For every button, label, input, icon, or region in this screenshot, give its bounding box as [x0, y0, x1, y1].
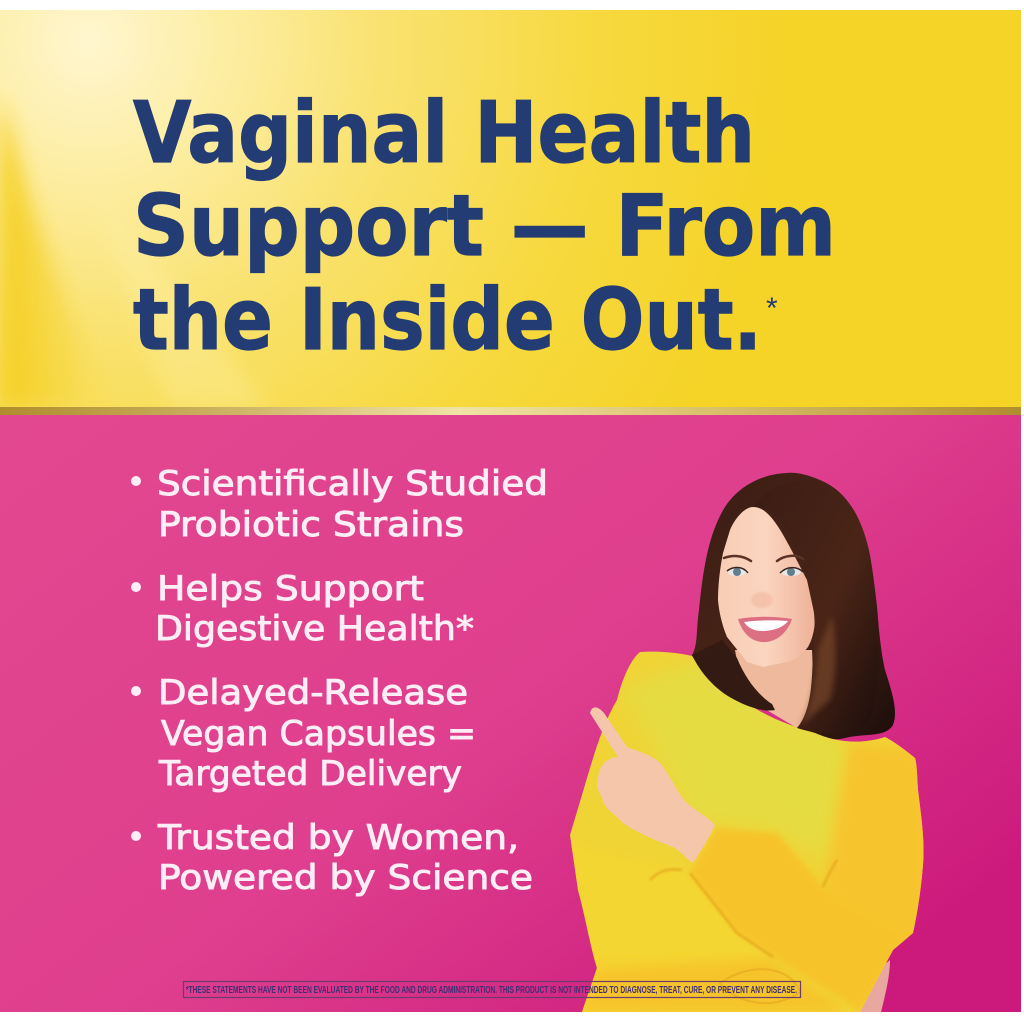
panel: pink lower background — [0, 415, 1021, 1012]
bullet: delayed release capsules — [131, 673, 476, 794]
bullet: digestive health: Helps Support — [157, 569, 424, 609]
heading: the Inside Out. — [133, 271, 762, 370]
panel: yellow headline background — [0, 10, 1021, 408]
disclaimer box — [184, 982, 800, 998]
bullet: delayed release capsules: Vegan Capsules = — [161, 714, 476, 754]
hair left strand over neck — [692, 640, 775, 711]
bullet: delayed release capsules: Delayed-Release — [158, 673, 468, 713]
pointing hand — [590, 707, 715, 863]
bullet: probiotic strains: Probiotic Strains — [158, 505, 464, 545]
hair back — [692, 473, 895, 739]
heading: * — [766, 292, 778, 325]
facial features — [724, 556, 803, 642]
photo: smiling woman in yellow sweater — [560, 473, 940, 1020]
neck — [735, 650, 813, 728]
lower hand — [845, 960, 890, 1012]
heading: Vaginal Health — [133, 84, 755, 183]
bullet: trusted by women: Trusted by Women, — [157, 818, 519, 858]
heading — [133, 84, 836, 370]
bullet: trusted by women: Powered by Science — [158, 858, 533, 898]
benefits list — [131, 464, 548, 898]
bullet: digestive health: Digestive Health* — [155, 609, 474, 649]
bullet: delayed release capsules: Targeted Delivery — [158, 754, 462, 794]
bullet: probiotic strains: Scientifically Studied — [157, 464, 548, 504]
heading: Support — From — [133, 177, 836, 276]
hair highlight — [800, 615, 836, 726]
sweater — [570, 652, 924, 1012]
bullet: trusted by women — [131, 818, 533, 898]
face — [718, 507, 815, 667]
bullet: probiotic strains — [131, 464, 548, 545]
gold divider band — [0, 407, 1021, 416]
bullet: digestive health — [131, 569, 474, 649]
hair front strand — [753, 480, 879, 734]
